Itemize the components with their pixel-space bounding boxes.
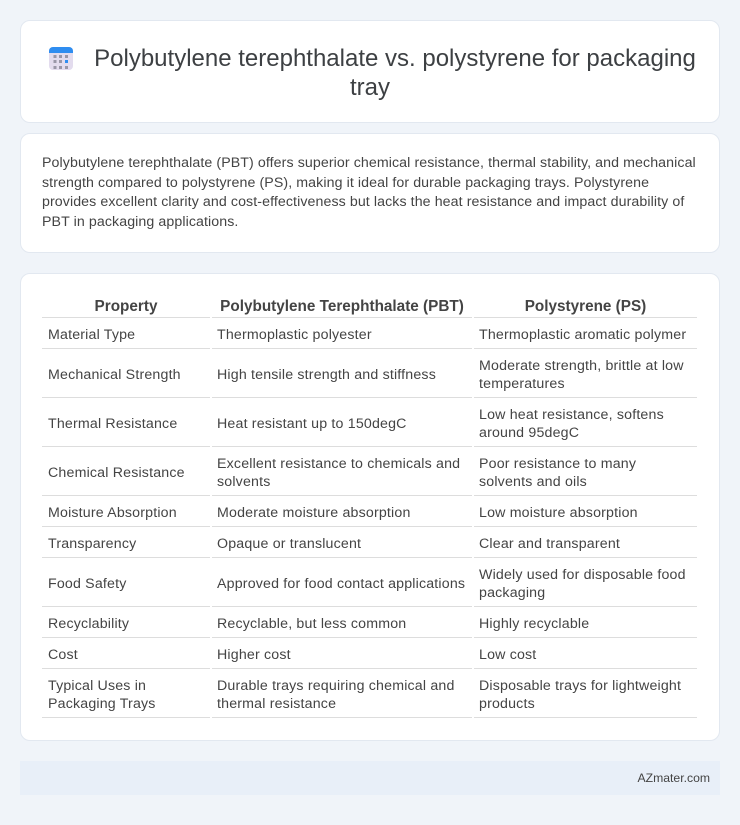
comparison table: Approved for food contact applications (217, 576, 465, 592)
intro paragraph: Polybutylene terephthalate (PBT) offers superior chemical resistance, thermal stability, and mechanical (42, 155, 696, 171)
comparison table: temperatures (479, 376, 565, 392)
comparison table: Property (95, 298, 157, 315)
comparison table: Moderate strength, brittle at low (479, 358, 684, 374)
comparison table: Moisture Absorption (48, 504, 177, 520)
comparison table: Polybutylene Terephthalate (PBT) (220, 298, 464, 315)
title: tray (350, 74, 390, 101)
comparison table: Low cost (479, 646, 536, 662)
footer bar (20, 761, 720, 795)
comparison table: Recyclability (48, 616, 129, 632)
comparison table: Material Type (48, 326, 135, 342)
comparison table: Durable trays requiring chemical and (217, 678, 455, 694)
intro paragraph: provides excellent clarity and cost-effectiveness but lacks the heat resistance and impact durability of (42, 194, 684, 210)
title (94, 45, 696, 101)
header card (20, 20, 720, 123)
comparison table: Mechanical Strength (48, 366, 181, 382)
comparison table: Typical Uses in (48, 678, 146, 694)
comparison table: Low moisture absorption (479, 504, 638, 520)
panel: comparison table (20, 273, 720, 741)
comparison table: Heat resistant up to 150degC (217, 416, 407, 432)
icon: calendar (49, 47, 73, 70)
comparison table: solvents and oils (479, 474, 587, 490)
intro paragraph (42, 155, 696, 230)
comparison table: High tensile strength and stiffness (217, 366, 436, 382)
comparison table: products (479, 696, 535, 712)
comparison table: Highly recyclable (479, 616, 589, 632)
comparison table: Packaging Trays (48, 696, 156, 712)
comparison table: Excellent resistance to chemicals and (217, 456, 460, 472)
comparison table: Thermoplastic aromatic polymer (479, 326, 686, 342)
footer credit: AZmater.com (638, 771, 710, 785)
comparison table: Moderate moisture absorption (217, 504, 411, 520)
comparison table: Thermoplastic polyester (217, 326, 372, 342)
comparison table: thermal resistance (217, 696, 336, 712)
comparison table: Polystyrene (PS) (525, 298, 646, 315)
title: Polybutylene terephthalate vs. polystyrene for packaging (94, 45, 696, 72)
comparison table: around 95degC (479, 424, 579, 440)
comparison table: Recyclable, but less common (217, 616, 406, 632)
comparison table: packaging (479, 584, 545, 600)
comparison table: Low heat resistance, softens (479, 406, 664, 422)
comparison table: Widely used for disposable food (479, 566, 686, 582)
comparison table: solvents (217, 474, 270, 490)
comparison table: Food Safety (48, 576, 126, 592)
comparison table: Cost (48, 646, 78, 662)
comparison table: Chemical Resistance (48, 464, 185, 480)
intro paragraph: strength compared to polystyrene (PS), making it ideal for durable packaging trays. Polystyrene (42, 175, 649, 191)
intro text panel (20, 133, 720, 253)
comparison table: Poor resistance to many (479, 456, 636, 472)
comparison table: Higher cost (217, 646, 291, 662)
intro paragraph: PBT in packaging applications. (42, 214, 238, 230)
comparison table: Clear and transparent (479, 536, 620, 552)
comparison table: Opaque or translucent (217, 536, 361, 552)
comparison table (42, 298, 697, 718)
comparison table: Thermal Resistance (48, 416, 177, 432)
comparison table: Disposable trays for lightweight (479, 678, 681, 694)
comparison table: Transparency (48, 536, 136, 552)
